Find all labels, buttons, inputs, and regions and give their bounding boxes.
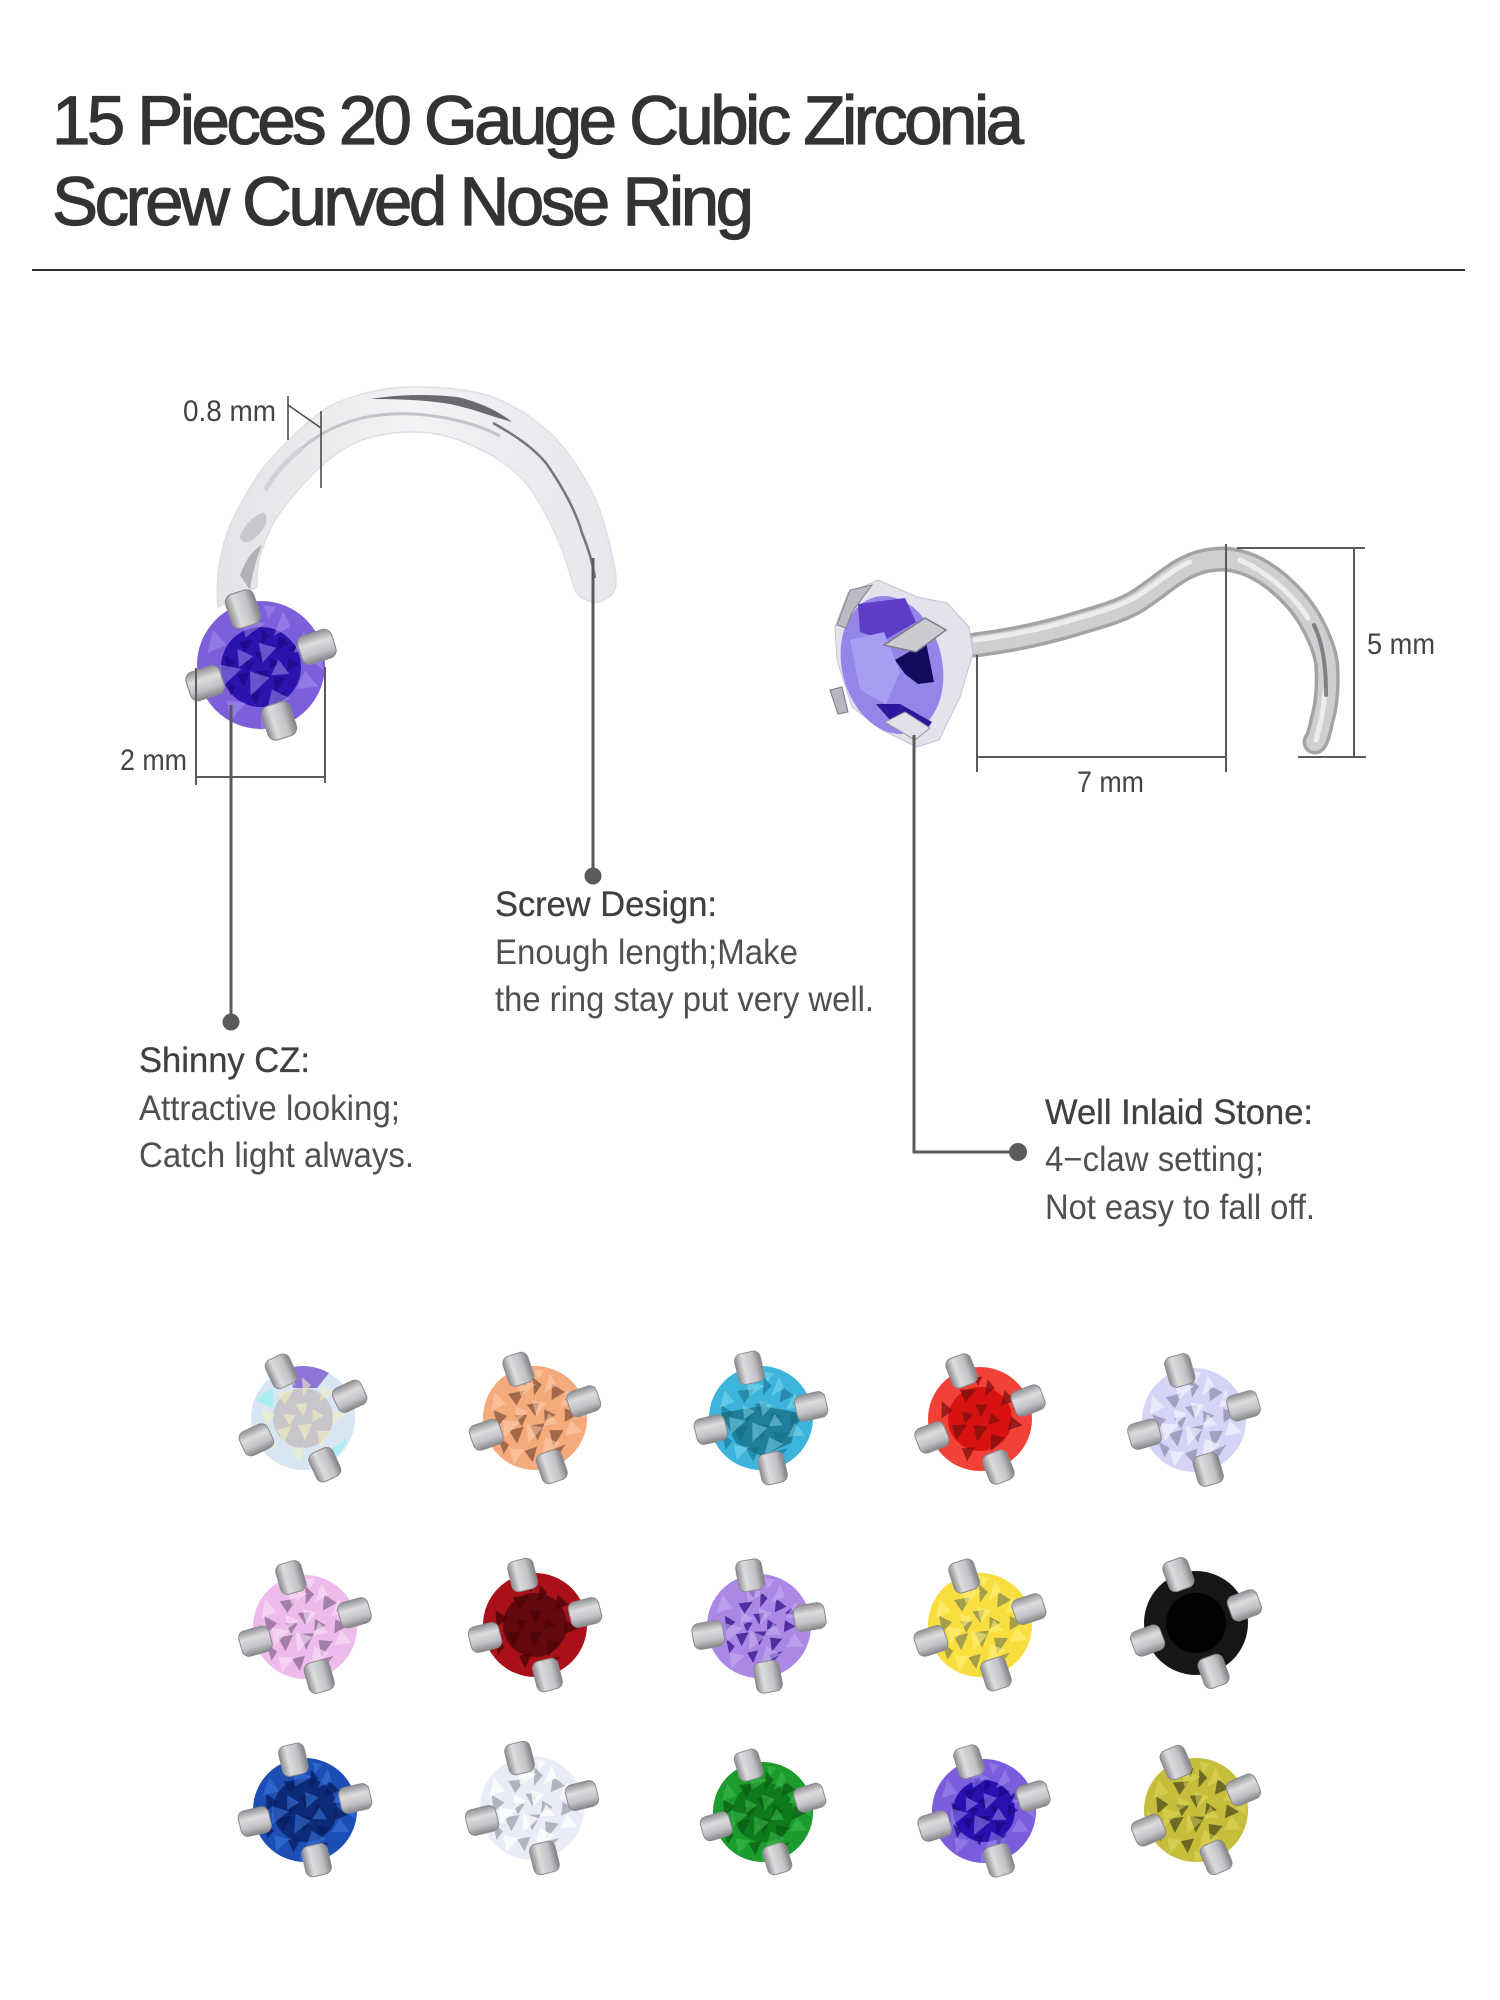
dimension: 0.8 mm: 0.8 mm [183,395,276,428]
gem: aqua [681,1338,841,1498]
gem: tanzanite [900,1727,1068,1895]
dimension: 2 mm [120,667,325,785]
gem: clear [451,1727,613,1889]
dimension: 5 mm [1237,548,1435,757]
dimension: 7 mm [977,544,1226,799]
gem: yellow [896,1541,1064,1709]
gem: aurora clear [214,1329,392,1507]
dimension: 0.8 mm [183,395,321,488]
callout: shinny CZ: Shinny CZ: [139,1041,310,1080]
colour swatch grid [214,1329,1284,1898]
side wire [975,559,1327,742]
dimension: 2 mm: 2 mm [120,744,187,777]
dimension: 5 mm: 5 mm [1367,628,1435,661]
product: curved nose ring front view [165,387,616,761]
callout: screw design: the ring stay put very well. [495,980,874,1019]
gem: orange [450,1333,620,1503]
dimension: 7 mm: 7 mm [1077,766,1144,799]
callout: screw design: Screw Design: [495,885,717,924]
gem: violet [681,1548,837,1704]
gem: dark red [454,1544,616,1706]
gem: sapphire [225,1730,385,1890]
title: Screw Curved Nose Ring [52,163,754,240]
callout: screw design [495,885,874,1019]
callout: screw design: Enough length;Make [495,933,798,972]
leader: well inlaid stone [914,735,1027,1161]
callout: well inlaid stone [1045,1093,1315,1227]
gem: black [1110,1537,1282,1709]
gem: red [893,1332,1067,1506]
gem: lilac [1111,1337,1277,1503]
callout: shinny CZ [139,1041,414,1175]
callout: well inlaid stone: 4−claw setting; [1045,1140,1264,1179]
callout: shinny CZ: Catch light always. [139,1136,414,1175]
callout: well inlaid stone: Not easy to fall off. [1045,1188,1315,1227]
callout: well inlaid stone: Well Inlaid Stone: [1045,1093,1313,1132]
leader: screw design [584,558,602,884]
side stone [827,580,973,747]
gem: pink [222,1544,388,1710]
leader: shinny CZ [222,705,240,1030]
curved wire [217,387,616,607]
title: 15 Pieces 20 Gauge Cubic Zirconia [52,82,1025,159]
product: nose ring side view [827,559,1327,747]
callout: shinny CZ: Attractive looking; [139,1089,400,1128]
gem: olive [1108,1722,1284,1898]
gem: green [684,1733,842,1891]
title [52,82,1025,240]
purple stone with 4 prongs [165,569,357,761]
